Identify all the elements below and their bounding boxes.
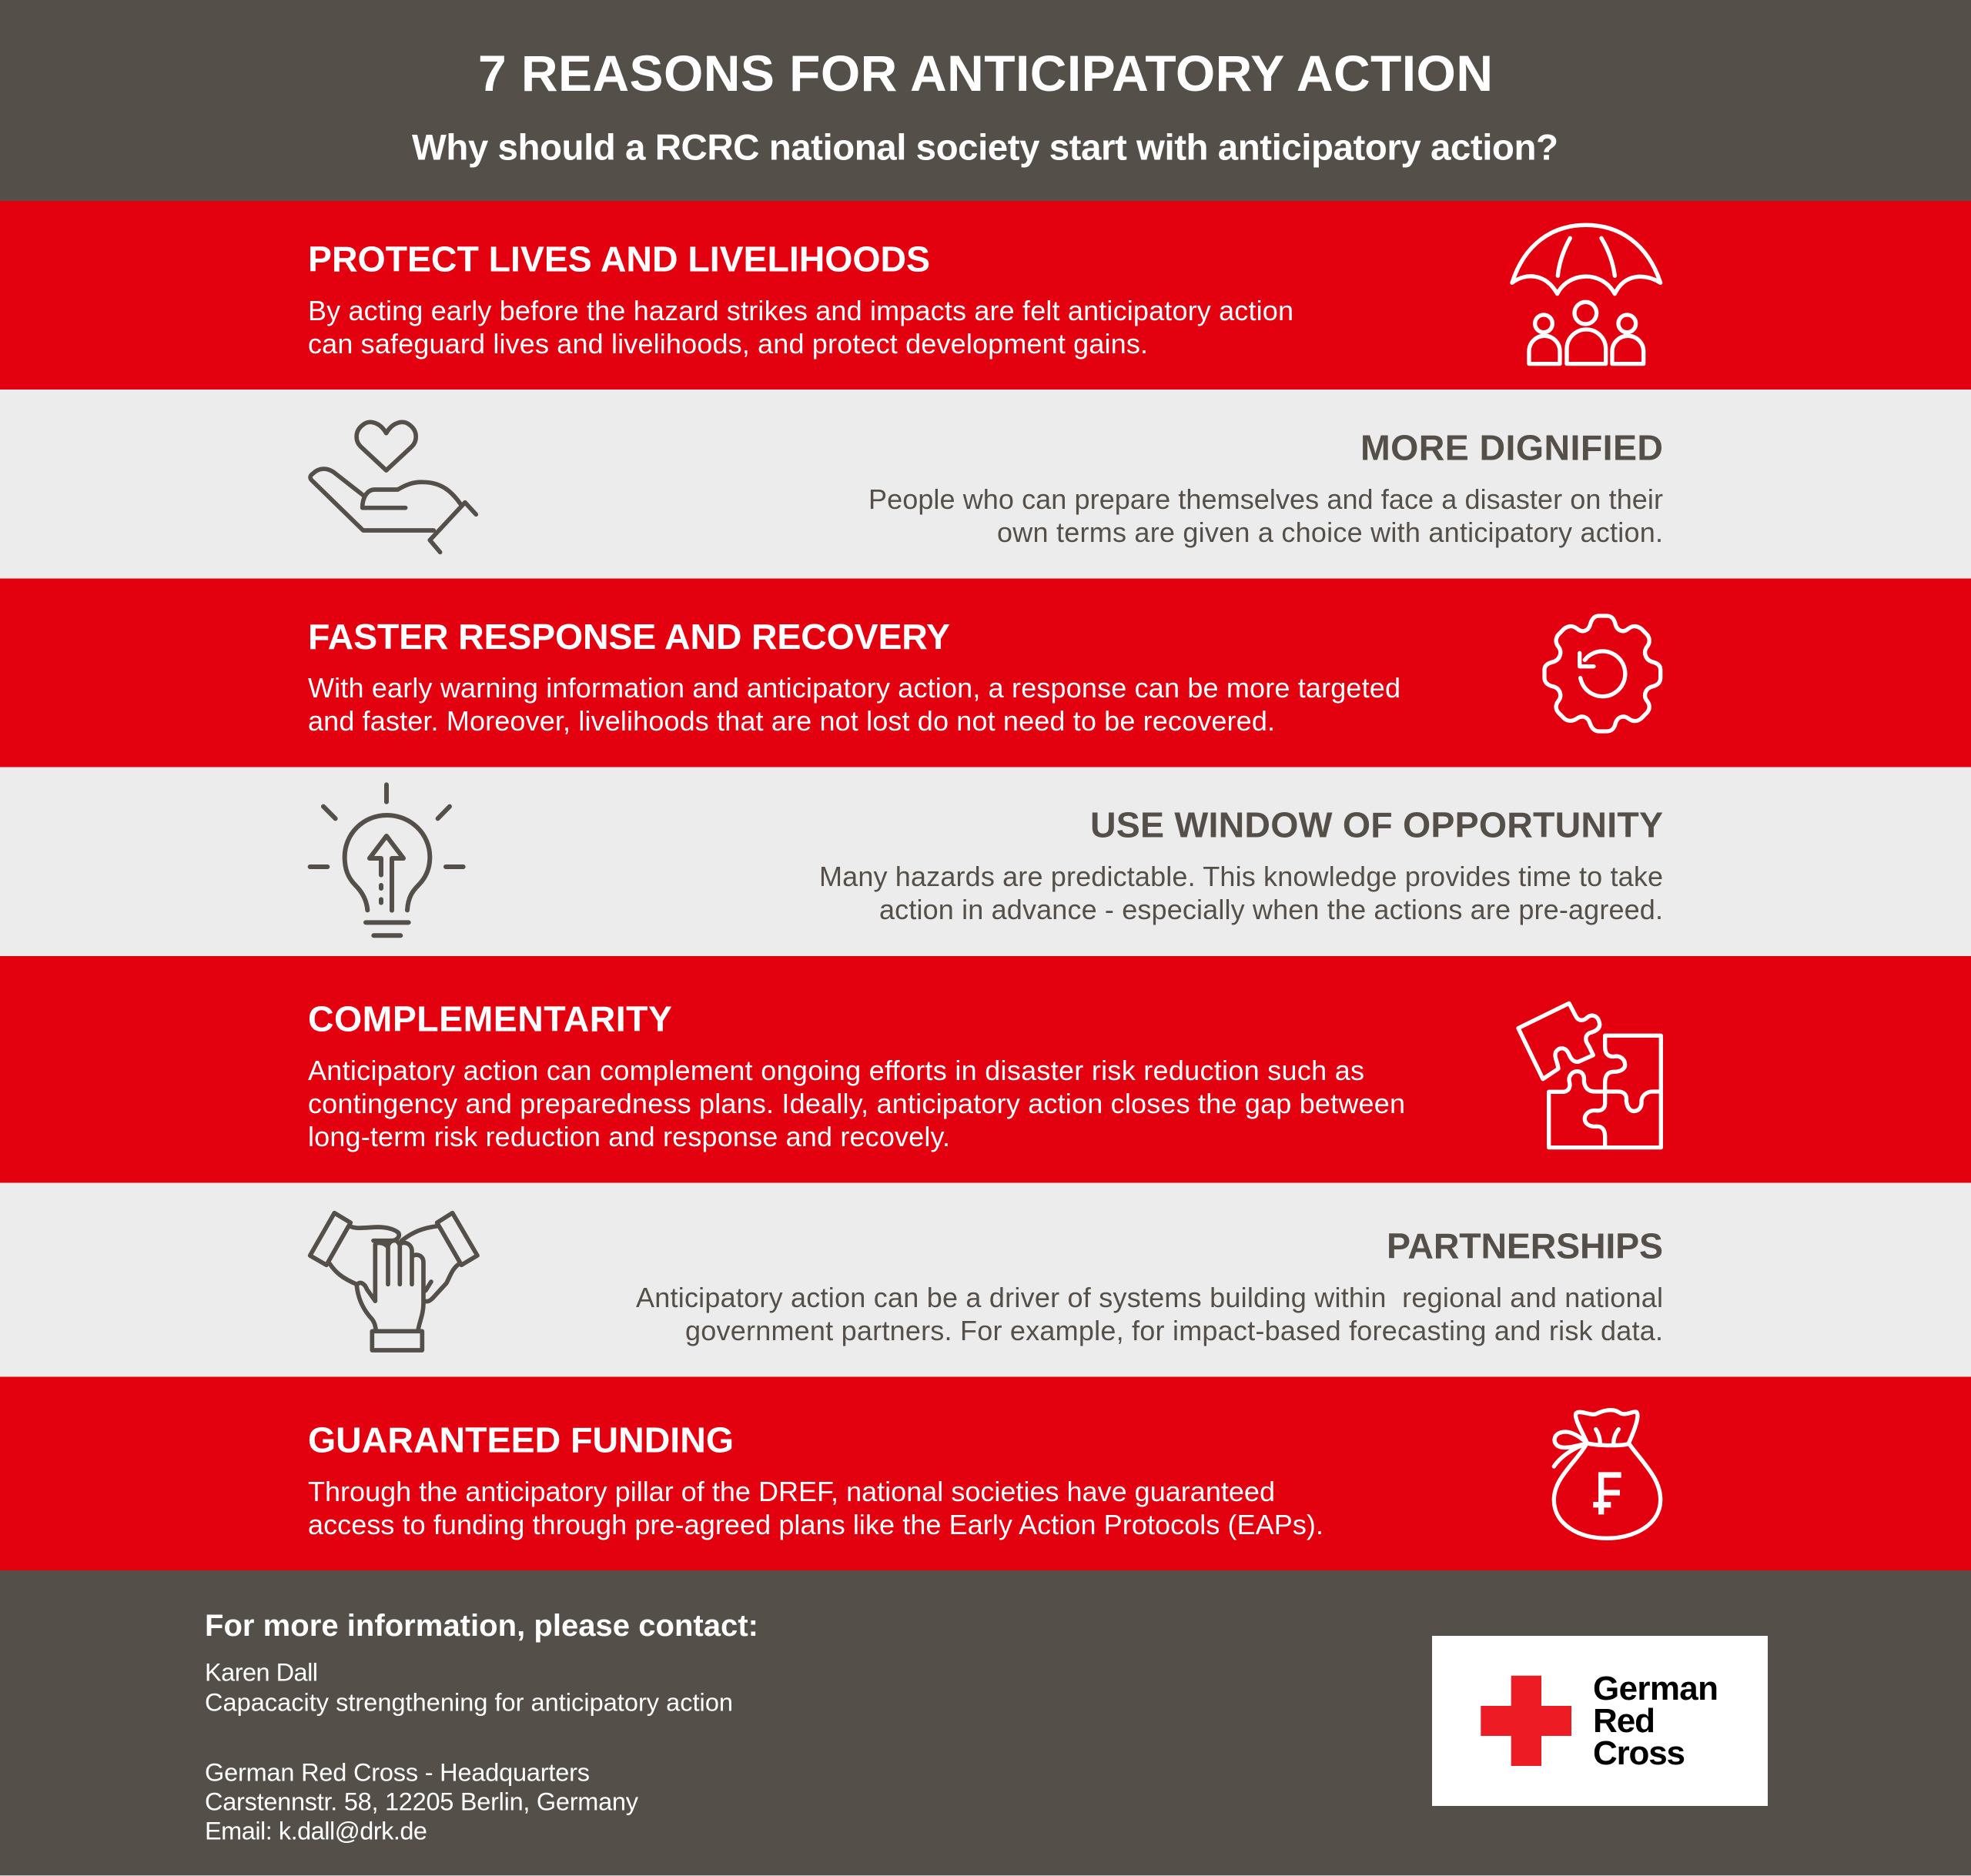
icon: puzzle pieces [1518, 1003, 1661, 1148]
heading: complementarity: COMPLEMENTARITY [308, 999, 672, 1039]
logo wordmark: German [1593, 1670, 1718, 1707]
text: complementarity [308, 1055, 1405, 1152]
icon: gear with return arrow [1544, 616, 1661, 731]
logo wordmark [1593, 1670, 1718, 1772]
subtitle: Why should a RCRC national society start with anticipatory action? [412, 128, 1558, 168]
text: protect lives [308, 295, 1293, 359]
text: partnerships [636, 1282, 1663, 1346]
text: guaranteed funding: Through the anticipatory pillar of the DREF, national societies have guaranteed [308, 1476, 1275, 1507]
text: protect lives: By acting early before the hazard strikes and impacts are felt anticipatory action [308, 295, 1293, 326]
footer panel [0, 1570, 1971, 1876]
contact address: Email: k.dall@drk.de [205, 1817, 427, 1844]
logo: German Red Cross [1432, 1636, 1768, 1806]
text: complementarity: Anticipatory action can complement ongoing efforts in disaster risk reduction such as [308, 1055, 1364, 1086]
icon: red cross [1481, 1676, 1571, 1766]
contact person: Karen Dall [205, 1658, 318, 1686]
contact address [205, 1758, 639, 1844]
text: more dignified: People who can prepare themselves and face a disaster on their [868, 483, 1663, 515]
text: complementarity: long-term risk reduction and response and recovely. [308, 1121, 950, 1152]
contact address: German Red Cross - Headquarters [205, 1758, 590, 1786]
logo wordmark: Red [1593, 1702, 1655, 1740]
text: partnerships: government partners. For example, for impact-based forecasting and risk data. [685, 1315, 1663, 1346]
contact address: Carstennstr. 58, 12205 Berlin, Germany [205, 1787, 639, 1815]
logo wordmark: Cross [1593, 1734, 1685, 1772]
text: faster response: and faster. Moreover, livelihoods that are not lost do not need to be recovered. [308, 705, 1275, 737]
contact heading: For more information, please contact: [205, 1609, 758, 1643]
contact person [205, 1658, 733, 1717]
panel: guaranteed funding [0, 1376, 1971, 1570]
icon: joined hands [310, 1213, 477, 1350]
panel: complementarity [0, 956, 1971, 1182]
panel: more dignified [0, 390, 1971, 579]
icon: hand holding heart [310, 422, 476, 552]
heading: guaranteed funding: GUARANTEED FUNDING [308, 1420, 734, 1460]
text: complementarity: contingency and preparedness plans. Ideally, anticipatory action closes the gap between [308, 1088, 1405, 1119]
heading: partnerships: PARTNERSHIPS [1387, 1226, 1663, 1266]
title: 7 REASONS FOR ANTICIPATORY ACTION [478, 45, 1493, 102]
heading: protect lives: PROTECT LIVES AND LIVELIHOODS [308, 239, 930, 279]
text: guaranteed funding: access to funding through pre-agreed plans like the Early Action Protocols (EAPs). [308, 1509, 1323, 1540]
text: guaranteed funding [308, 1476, 1323, 1540]
header panel [0, 0, 1971, 201]
text: window of opportunity: action in advance - especially when the actions are pre-agreed. [879, 894, 1663, 925]
heading: window of opportunity: USE WINDOW OF OPPORTUNITY [1090, 805, 1663, 845]
panel: protect lives and livelihoods [0, 201, 1971, 390]
text: faster response [308, 672, 1400, 737]
heading: more dignified: MORE DIGNIFIED [1360, 428, 1663, 468]
panel: partnerships [0, 1182, 1971, 1376]
contact person: Capacacity strengthening for anticipatory action [205, 1689, 733, 1717]
text: window of opportunity: Many hazards are predictable. This knowledge provides time to take [819, 861, 1663, 892]
icon: umbrella over people [1512, 225, 1661, 364]
panel: use window of opportunity [0, 767, 1971, 956]
text: protect lives: can safeguard lives and livelihoods, and protect development gains. [308, 328, 1148, 359]
text: more dignified [868, 483, 1663, 548]
icon: light bulb with arrow [310, 784, 463, 935]
text: partnerships: Anticipatory action can be a driver of systems building within regional and national [636, 1282, 1663, 1313]
text: faster response: With early warning information and anticipatory action, a response can be more targeted [308, 672, 1400, 704]
text: window of opportunity [819, 861, 1663, 925]
panel: faster response and recovery [0, 579, 1971, 767]
text: more dignified: own terms are given a choice with anticipatory action. [997, 517, 1663, 548]
heading: faster response: FASTER RESPONSE AND RECOVERY [308, 617, 950, 657]
icon: money bag [1554, 1410, 1661, 1538]
